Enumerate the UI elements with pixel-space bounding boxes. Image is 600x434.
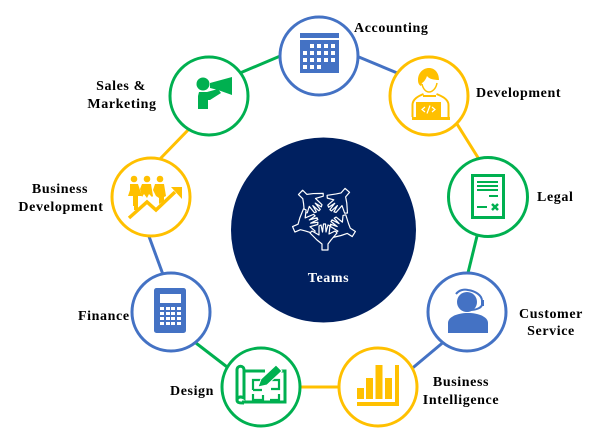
- icon: developer at laptop: [412, 68, 450, 120]
- icon: legal document: [472, 176, 504, 218]
- icon: bar chart: [357, 365, 399, 406]
- label: Sales & Marketing: Sales &: [96, 79, 146, 94]
- node: Finance: [132, 273, 210, 351]
- center label: Teams: [308, 271, 349, 286]
- icon: team and growth arrow: [128, 176, 182, 218]
- label: Customer Service: Customer: [519, 307, 583, 322]
- node: Sales & Marketing: [170, 57, 248, 135]
- node: Design: [222, 348, 300, 426]
- label: Business Development: Business: [32, 182, 88, 197]
- label: Legal: Legal: [537, 190, 573, 205]
- label: Business Intelligence line 2: Intelligence: [423, 393, 499, 408]
- label: Business Intelligence: Business: [433, 375, 489, 390]
- node: Business Intelligence: [339, 348, 417, 426]
- label: Development: Development: [476, 86, 561, 101]
- icon: calendar: [300, 33, 339, 73]
- node: Development: [390, 57, 468, 135]
- connector ring: [147, 54, 482, 387]
- label: Business Development line 2: Development: [18, 200, 104, 215]
- node: Customer Service: [428, 273, 506, 351]
- icon: person with megaphone: [196, 77, 232, 109]
- label: Design: Design: [170, 384, 214, 399]
- label: Sales & Marketing line 2: Marketing: [87, 97, 157, 112]
- icon: calculator: [154, 288, 186, 333]
- label: Accounting: Accounting: [354, 21, 428, 36]
- node: Accounting: [280, 17, 358, 95]
- icon: joined hands: [288, 182, 360, 250]
- icon: support agent: [448, 290, 488, 333]
- node: Legal: [448, 158, 528, 236]
- label: Customer Service line 2: Service: [527, 324, 575, 339]
- node: Business Development: [112, 158, 190, 236]
- label: Finance: Finance: [78, 309, 130, 324]
- center circle: Teams: [231, 138, 416, 322]
- icon: blueprint and pencil: [237, 365, 285, 403]
